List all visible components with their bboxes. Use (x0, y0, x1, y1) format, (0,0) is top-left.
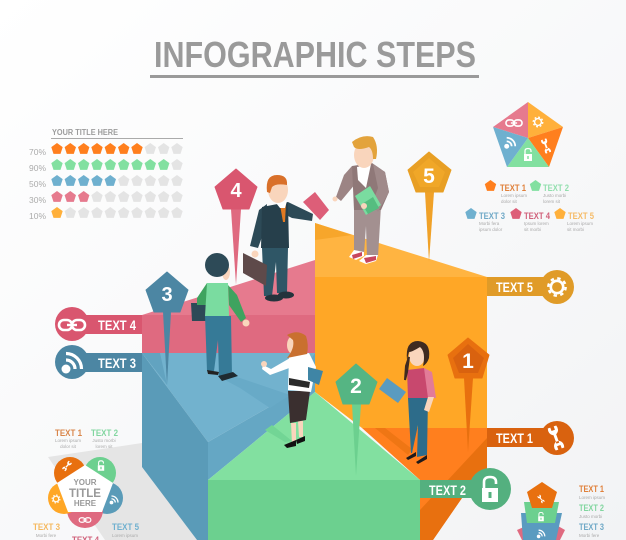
stacked pentagon chart bottom right (517, 482, 565, 540)
stacked chart labels: TEXT 3 (579, 522, 604, 532)
flower chart labels: Justo morbi (92, 438, 116, 443)
step 2 green block (208, 392, 420, 540)
flower chart labels: TEXT 5 (112, 522, 139, 532)
rating chart: 90% (29, 163, 46, 173)
flower chart bottom left (48, 457, 123, 528)
label: TEXT 1: TEXT 1 (496, 431, 533, 446)
stacked chart labels: Lorem ipsum (579, 495, 605, 500)
rating chart: 50% (29, 179, 46, 189)
pentagon chart legend: lorem sit (543, 199, 561, 204)
pentagon chart legend: TEXT 2 (543, 183, 569, 194)
pentagon chart legend: TEXT 5 (568, 211, 595, 222)
flower chart labels (33, 428, 139, 540)
pin 1 (448, 338, 489, 452)
stacked chart labels: TEXT 1 (579, 484, 604, 494)
woman with tablet (step 1) (379, 341, 436, 464)
pentagon chart legend: Justo morbi (543, 193, 566, 198)
rating chart: 30% (29, 195, 46, 205)
step 3 blue block (142, 353, 315, 540)
label: TEXT 4: TEXT 4 (98, 318, 136, 333)
pin 3 (146, 272, 188, 385)
label: TEXT 3: TEXT 3 (98, 356, 136, 371)
label: TEXT 2: TEXT 2 (429, 483, 466, 498)
pin 3: 3 (161, 284, 173, 306)
pentagon chart legend: dolor sit (501, 199, 518, 204)
woman with skirt (step 3 edge) (261, 332, 323, 448)
flower chart labels: dolor sit (60, 444, 77, 449)
man with briefcase (step 4) (243, 175, 329, 302)
rating chart (29, 128, 183, 221)
pentagon chart legend: sit morbi (567, 227, 584, 232)
flower chart bottom left: TITLE (69, 488, 101, 500)
pin 5 (408, 152, 451, 262)
step 4 pink block (142, 260, 315, 353)
pentagon chart legend: TEXT 3 (479, 211, 505, 222)
label: TEXT 5: TEXT 5 (496, 280, 533, 295)
stacked chart labels: Morbi fere (579, 533, 600, 538)
flower chart bottom left: HERE (74, 499, 97, 508)
pentagon chart legend: ipsum dolor (479, 227, 503, 232)
title: INFOGRAPHIC STEPS (154, 34, 476, 75)
pentagon chart top right (493, 102, 563, 167)
pin 4: 4 (230, 180, 242, 202)
rating chart: 70% (29, 147, 46, 157)
label: TEXT 4 (55, 307, 142, 341)
pin 5: 5 (423, 165, 435, 188)
flower chart labels: lorem sit (95, 444, 113, 449)
flower chart labels: Lorem ipsum (55, 438, 81, 443)
step 1 dark orange block (362, 428, 487, 540)
pentagon chart legend: TEXT 4 (524, 211, 551, 222)
flower chart bottom left: YOUR (73, 478, 97, 487)
rating chart: YOUR TITLE HERE (52, 128, 119, 137)
pentagon chart legend: Lorem ipsum (501, 193, 527, 198)
pin 4 (215, 169, 257, 285)
pin 2 (336, 364, 377, 476)
pentagon chart legend: Lorem ipsum (567, 221, 593, 226)
label: TEXT 3 (55, 345, 142, 379)
label: TEXT 2 (420, 468, 511, 510)
flower chart labels: Lorem ipsum (112, 533, 138, 538)
pentagon chart legend: Morbi fera (479, 221, 500, 226)
flower chart labels: Morbi fere (36, 533, 57, 538)
pentagon chart legend: Ipsum lorem (524, 221, 549, 226)
flower chart labels: TEXT 3 (33, 522, 60, 532)
label: TEXT 1 (487, 421, 574, 455)
pin 1: 1 (462, 350, 474, 373)
stacked chart labels (579, 484, 605, 538)
pentagon chart legend: sit morbi (524, 227, 541, 232)
step 5 orange block (315, 223, 487, 428)
stacked chart labels: Justo morbi (579, 514, 602, 519)
pin 2: 2 (350, 375, 362, 398)
stacked chart labels: TEXT 2 (579, 503, 604, 513)
rating chart: 10% (29, 211, 46, 221)
flower chart labels: TEXT 2 (91, 428, 118, 438)
pentagon chart legend: TEXT 1 (500, 183, 527, 194)
man with folder (step 5) (332, 136, 389, 264)
label: TEXT 5 (487, 270, 574, 304)
flower chart labels: TEXT 1 (55, 428, 82, 438)
man with curls (step 3) (191, 253, 250, 381)
pentagon chart legend (465, 180, 595, 232)
floor shadow (48, 443, 197, 540)
